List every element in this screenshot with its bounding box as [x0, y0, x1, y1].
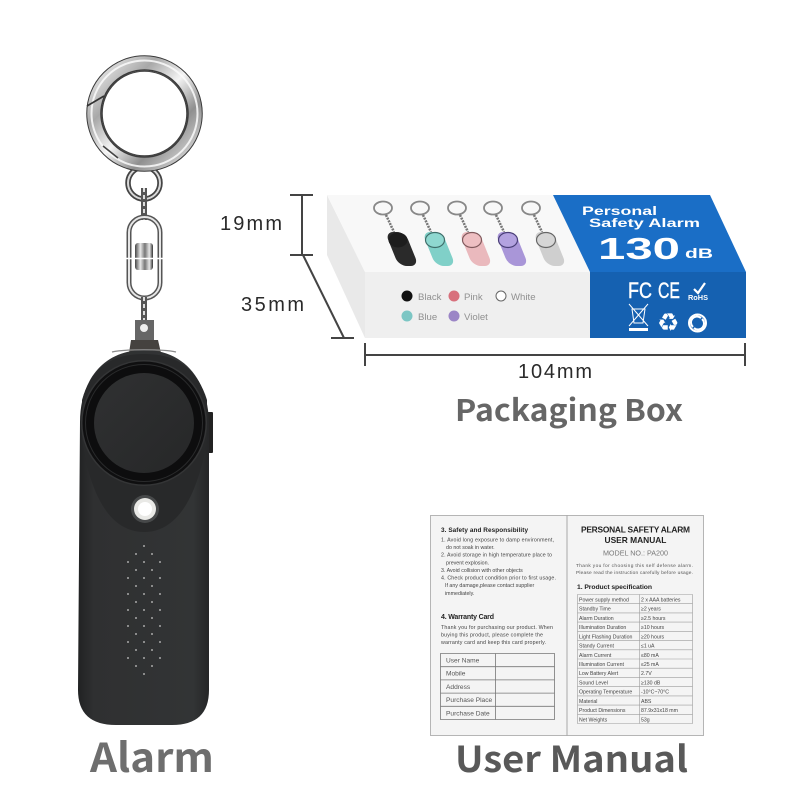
intro text: Please read the instruction carefully before usage. — [576, 570, 693, 576]
blue label front — [590, 272, 746, 338]
spec table: Standby Time — [579, 607, 611, 613]
section: safety and responsibility: If any damage,please contact supplier — [445, 583, 534, 589]
colour legend: Blue — [418, 312, 437, 323]
alarm thumbnail: violet — [484, 202, 529, 266]
manual title: MODEL NO.: PA200 — [603, 548, 668, 558]
heading: Alarm: Alarm — [89, 726, 214, 784]
section: warranty card: 4. Warranty Card — [441, 614, 494, 621]
spec table: ABS — [641, 699, 652, 705]
spec table: ≤1 uA — [641, 644, 655, 650]
manual pages — [430, 515, 704, 736]
speaker button — [81, 360, 207, 486]
label title: Safety Alarm — [589, 218, 700, 230]
manual title — [581, 524, 690, 558]
section: safety and responsibility: prevent explosion. — [446, 560, 489, 566]
box front face — [365, 272, 590, 338]
spec table: Alarm Duration — [579, 616, 614, 622]
alarm thumbnail: black — [374, 202, 419, 266]
blue label top — [553, 195, 746, 272]
spec table: 2 x AAA batteries — [641, 598, 681, 604]
dimension: 104mm: 104mm — [518, 361, 592, 383]
intro text — [576, 563, 693, 576]
spec table: Material — [579, 699, 597, 705]
alarm thumbnail: pink — [448, 202, 493, 266]
section: warranty card: warranty card and keep this card properly. — [441, 640, 546, 646]
spec table: 87.9x31x18 mm — [641, 708, 678, 714]
spec table: Product Dimensions — [579, 708, 626, 714]
section: safety and responsibility — [441, 527, 556, 597]
spec table — [578, 594, 692, 724]
warranty table — [440, 654, 554, 720]
section: safety and responsibility: immediately. — [445, 591, 474, 597]
warranty table: Mobile — [446, 671, 466, 678]
spec table: Low Battery Alert — [579, 671, 619, 677]
colour legend — [402, 290, 536, 323]
alarm body — [78, 350, 213, 725]
box top face — [327, 195, 590, 272]
spec table: Standy Current — [579, 644, 614, 650]
packaging box — [327, 195, 746, 338]
LED light — [131, 495, 159, 523]
section: safety and responsibility: 4. Check product condition prior to first usage. — [441, 576, 556, 582]
dimension: 35mm — [241, 255, 354, 338]
spec table: ≥130 dB — [641, 680, 661, 686]
section: warranty card: Thank you for purchasing our product. When — [441, 625, 553, 631]
manual title: USER MANUAL — [605, 535, 666, 545]
spec table: Power supply method — [579, 598, 629, 604]
spec table: ≤25 mA — [641, 662, 659, 668]
small ring — [128, 167, 160, 199]
section: safety and responsibility: 3. Avoid collision with other objects — [441, 568, 523, 574]
certification icons — [628, 278, 708, 337]
spec table: ≥2.5 hours — [641, 616, 666, 622]
spec table: -10°C~70°C — [641, 690, 669, 696]
swivel chain — [126, 188, 163, 353]
alarm product — [78, 60, 213, 725]
spec table: ≥20 hours — [641, 634, 664, 640]
user manual — [430, 515, 704, 736]
dimension: 104mm — [365, 343, 745, 383]
spec table: Alarm Current — [579, 653, 612, 659]
label title — [582, 206, 713, 266]
section: warranty card: buying this product, please complete the — [441, 632, 543, 638]
certification icons: ♻ — [657, 309, 679, 337]
spec table: Net Weights — [579, 717, 608, 723]
label title: 130 — [598, 231, 680, 266]
colour legend: Black — [418, 292, 442, 303]
dimension: 35mm: 35mm — [241, 294, 304, 316]
spec table: Illumination Current — [579, 662, 625, 668]
colour legend: Pink — [464, 292, 483, 303]
spec table: 53g — [641, 717, 650, 723]
colour legend: Violet — [464, 312, 488, 323]
certification icons: CE — [658, 278, 680, 303]
box side face — [327, 195, 365, 338]
section: safety and responsibility: 2. Avoid storage in high temperature place to — [441, 552, 552, 558]
intro text: Thank you for choosing this self defense alarm. — [576, 563, 693, 569]
warranty table: Purchase Date — [446, 710, 490, 717]
alarm thumbnail: white — [522, 202, 567, 266]
spec table: Sound Level — [579, 680, 608, 686]
spec heading: 1. Product specification — [577, 584, 652, 591]
section: safety and responsibility: 3. Safety and Responsibility — [441, 527, 528, 534]
sound holes — [127, 545, 161, 675]
dimension: 19mm: 19mm — [220, 213, 282, 235]
spec table: Light Flashing Duration — [579, 634, 632, 640]
label title: dB — [685, 245, 713, 261]
section: safety and responsibility: do not soak in water. — [446, 545, 495, 551]
certification icons: FC — [628, 278, 652, 303]
heading: User Manual: User Manual — [455, 731, 688, 783]
label title: Personal — [582, 206, 657, 218]
heading: Packaging Box: Packaging Box — [455, 386, 683, 430]
key ring — [87, 60, 198, 166]
section: warranty card — [441, 614, 553, 646]
spec table: ≥10 hours — [641, 625, 664, 631]
spec table: 2.7V — [641, 671, 652, 677]
certification icons: RoHS — [688, 295, 708, 302]
warranty table: Purchase Place — [446, 697, 493, 704]
spec table: Illumination Duration — [579, 625, 626, 631]
manual title: PERSONAL SAFETY ALARM — [581, 524, 690, 534]
spec table: ≥2 years — [641, 607, 661, 613]
section: safety and responsibility: 1. Avoid long exposure to damp environment, — [441, 538, 554, 544]
dimension: 19mm — [220, 195, 313, 255]
colour legend: White — [511, 292, 536, 303]
alarm thumbnail: blue — [411, 202, 456, 266]
spec table: Operating Temperature — [579, 690, 632, 696]
warranty table: Address — [446, 684, 471, 691]
warranty table: User Name — [446, 658, 480, 664]
spec table: ≤80 mA — [641, 653, 659, 659]
